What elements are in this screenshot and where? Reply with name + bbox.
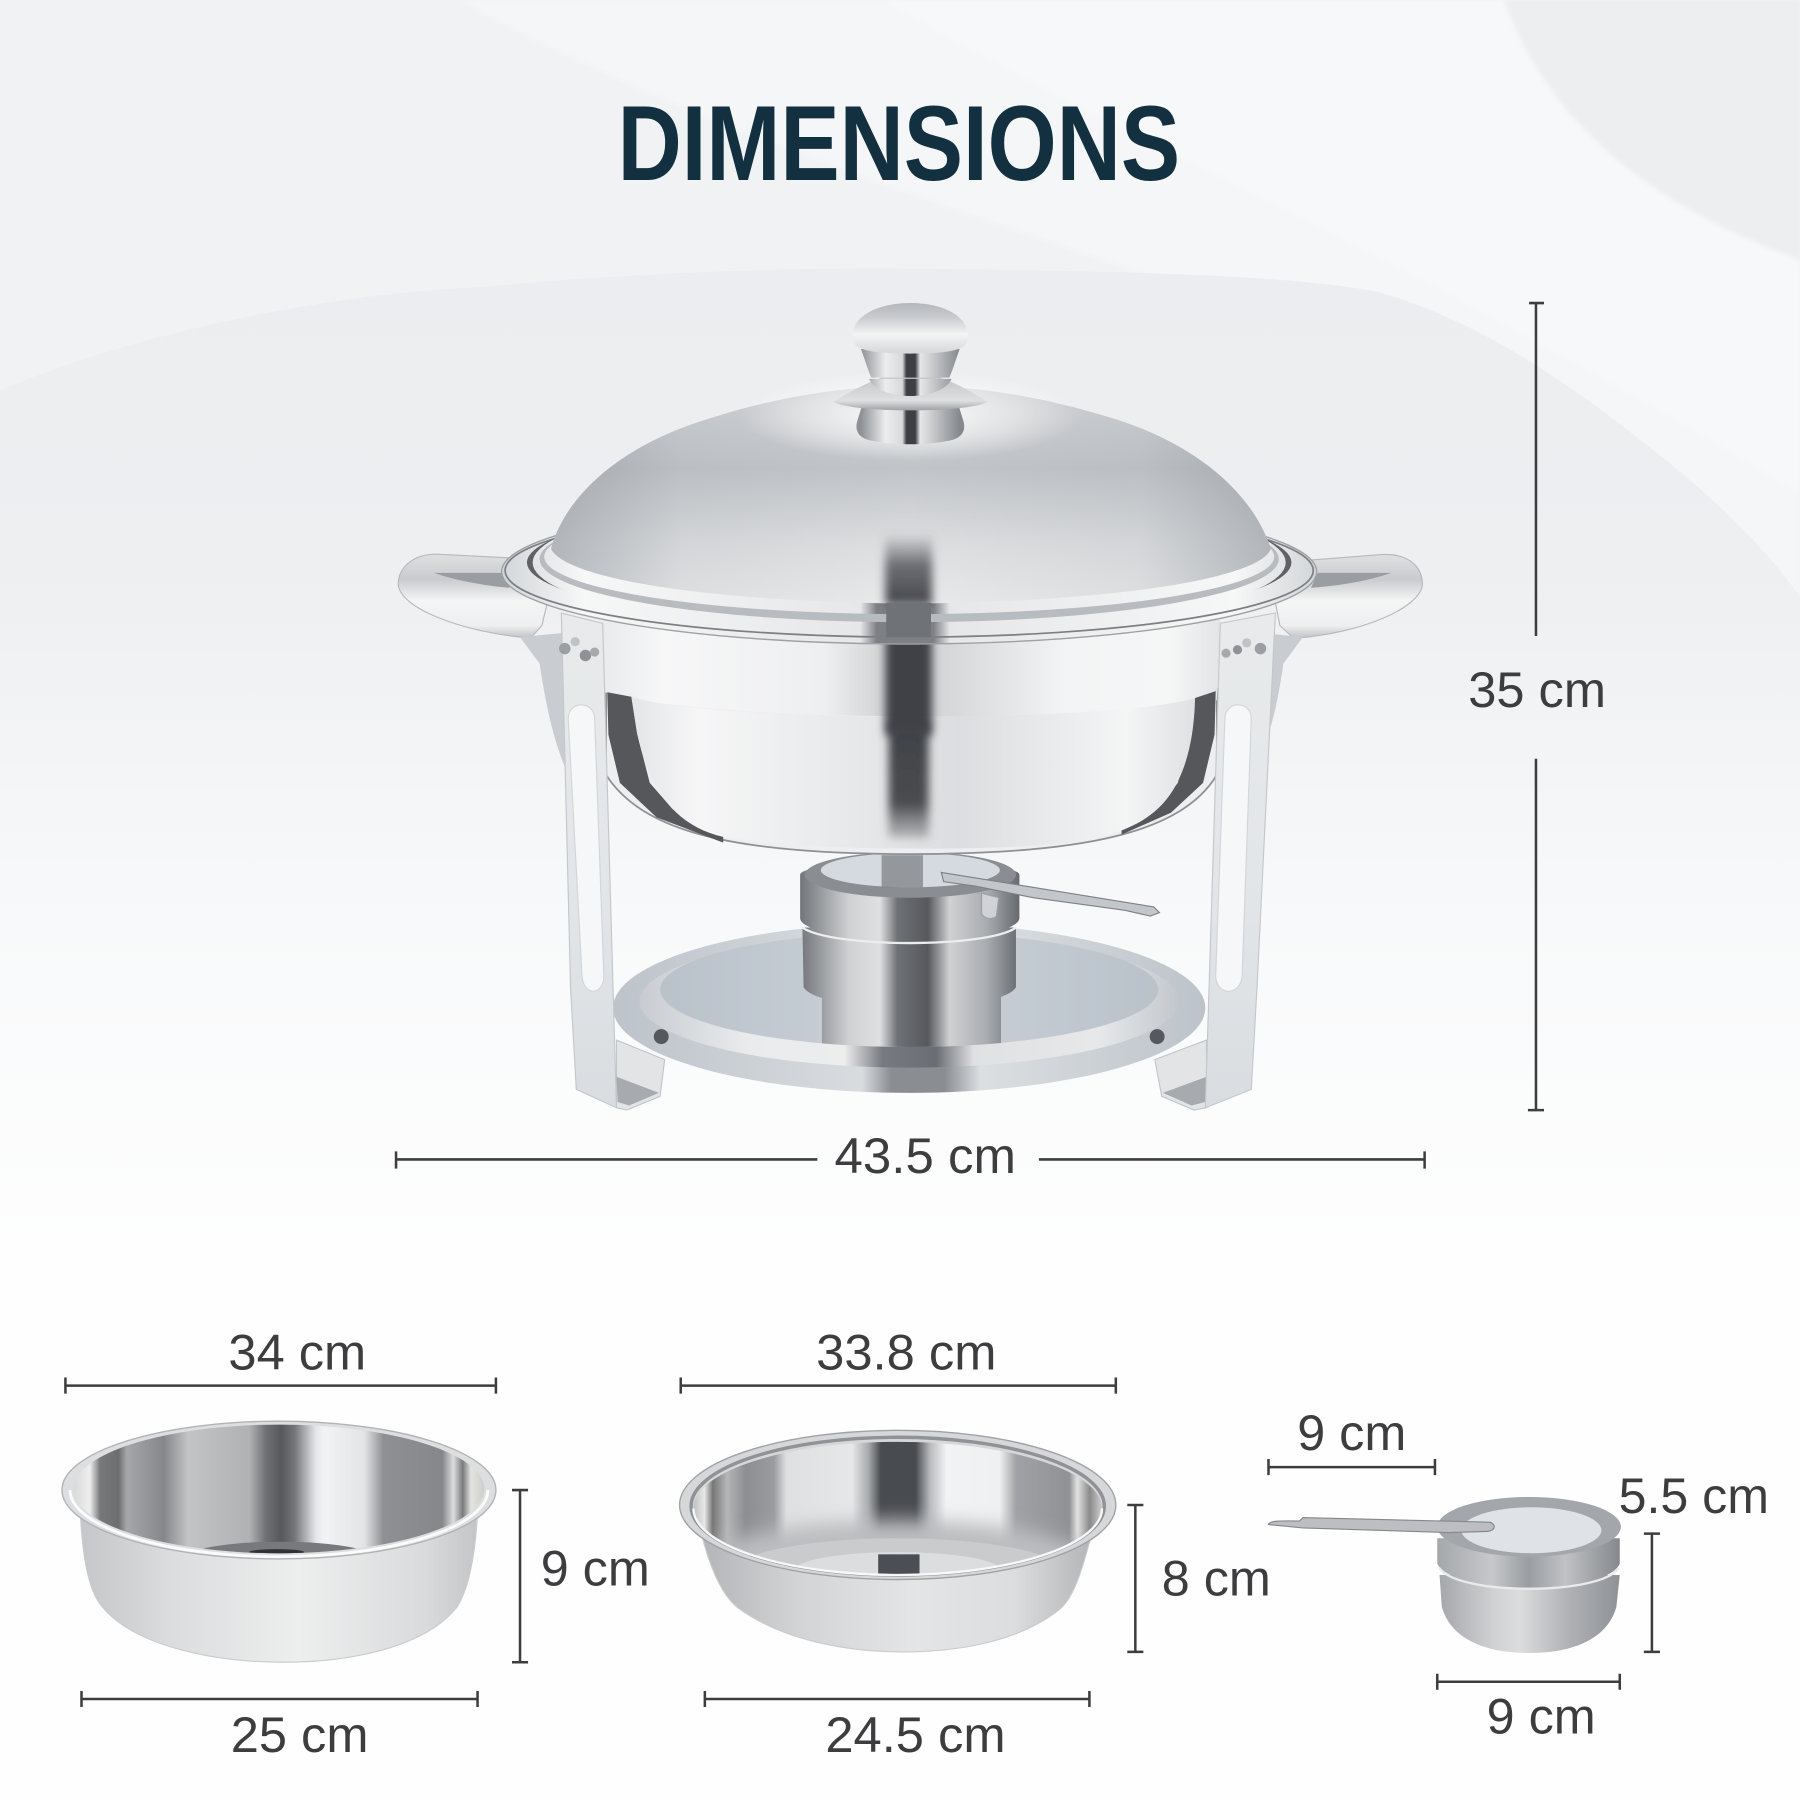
- food pan lower bowl: [631, 697, 1195, 849]
- dimension: pan 1 top width: [65, 1324, 496, 1394]
- label: 33.8 cm: [816, 1324, 996, 1381]
- dimension: pan 2 top width: [681, 1324, 1116, 1394]
- dimension: fuel clip length: [1268, 1404, 1435, 1475]
- left handle: [398, 554, 549, 638]
- dimension: chafer height: [1468, 303, 1606, 1110]
- food pan 1 illustration: [62, 1421, 496, 1662]
- label: 43.5 cm: [835, 1127, 1016, 1184]
- chafing dish product illustration: [398, 303, 1422, 1110]
- label: 9 cm: [1487, 1687, 1596, 1744]
- base plate: [613, 923, 1205, 1093]
- dome highlight: [738, 370, 1083, 461]
- label: 25 cm: [231, 1706, 368, 1763]
- left leg: [559, 613, 616, 1108]
- fuel holder illustration: [1268, 1497, 1621, 1653]
- dimension: pan 1 height: [512, 1490, 650, 1662]
- dome reflection stripe: [885, 534, 932, 605]
- right dark gap: [1122, 691, 1216, 835]
- label: 34 cm: [228, 1324, 366, 1381]
- outer water pan shell, left: [520, 631, 580, 767]
- dimension: fuel holder width: [1437, 1674, 1620, 1744]
- label: 35 cm: [1468, 661, 1606, 718]
- left foot: [616, 1040, 665, 1110]
- lid brim: [533, 492, 1286, 633]
- water pan lower lip: [606, 689, 1217, 854]
- dimension: pan 2 height: [1127, 1505, 1271, 1652]
- dimension: pan 1 bottom width: [82, 1691, 478, 1763]
- outer water pan shell, right: [1246, 631, 1303, 767]
- food pan 2 illustration: [680, 1430, 1116, 1652]
- label: 24.5 cm: [825, 1706, 1006, 1763]
- label: 9 cm: [541, 1539, 650, 1596]
- label: 9 cm: [1297, 1404, 1406, 1461]
- title: DIMENSIONS: [618, 83, 1180, 203]
- water pan upper body: [603, 620, 1220, 717]
- body reflection stripe: [885, 631, 932, 838]
- label: 5.5 cm: [1619, 1467, 1769, 1524]
- dimension: chafer width: [396, 1127, 1425, 1184]
- left leg bolts: [559, 637, 599, 661]
- dimension: pan 2 bottom width: [705, 1691, 1089, 1763]
- right handle: [1274, 554, 1422, 638]
- brim reflection stripe: [886, 603, 931, 637]
- lid knob: [833, 303, 987, 444]
- pan rim: [502, 498, 1317, 644]
- dimension: fuel holder height: [1619, 1467, 1769, 1652]
- lid dome: [551, 386, 1271, 604]
- fuel holder clip: [1268, 1518, 1494, 1533]
- fuel burner: [800, 852, 1159, 1008]
- left dark gap: [607, 692, 723, 843]
- label: 8 cm: [1162, 1550, 1271, 1607]
- right foot: [1155, 1040, 1207, 1110]
- right leg bolts: [1221, 638, 1266, 658]
- right leg: [1205, 613, 1275, 1108]
